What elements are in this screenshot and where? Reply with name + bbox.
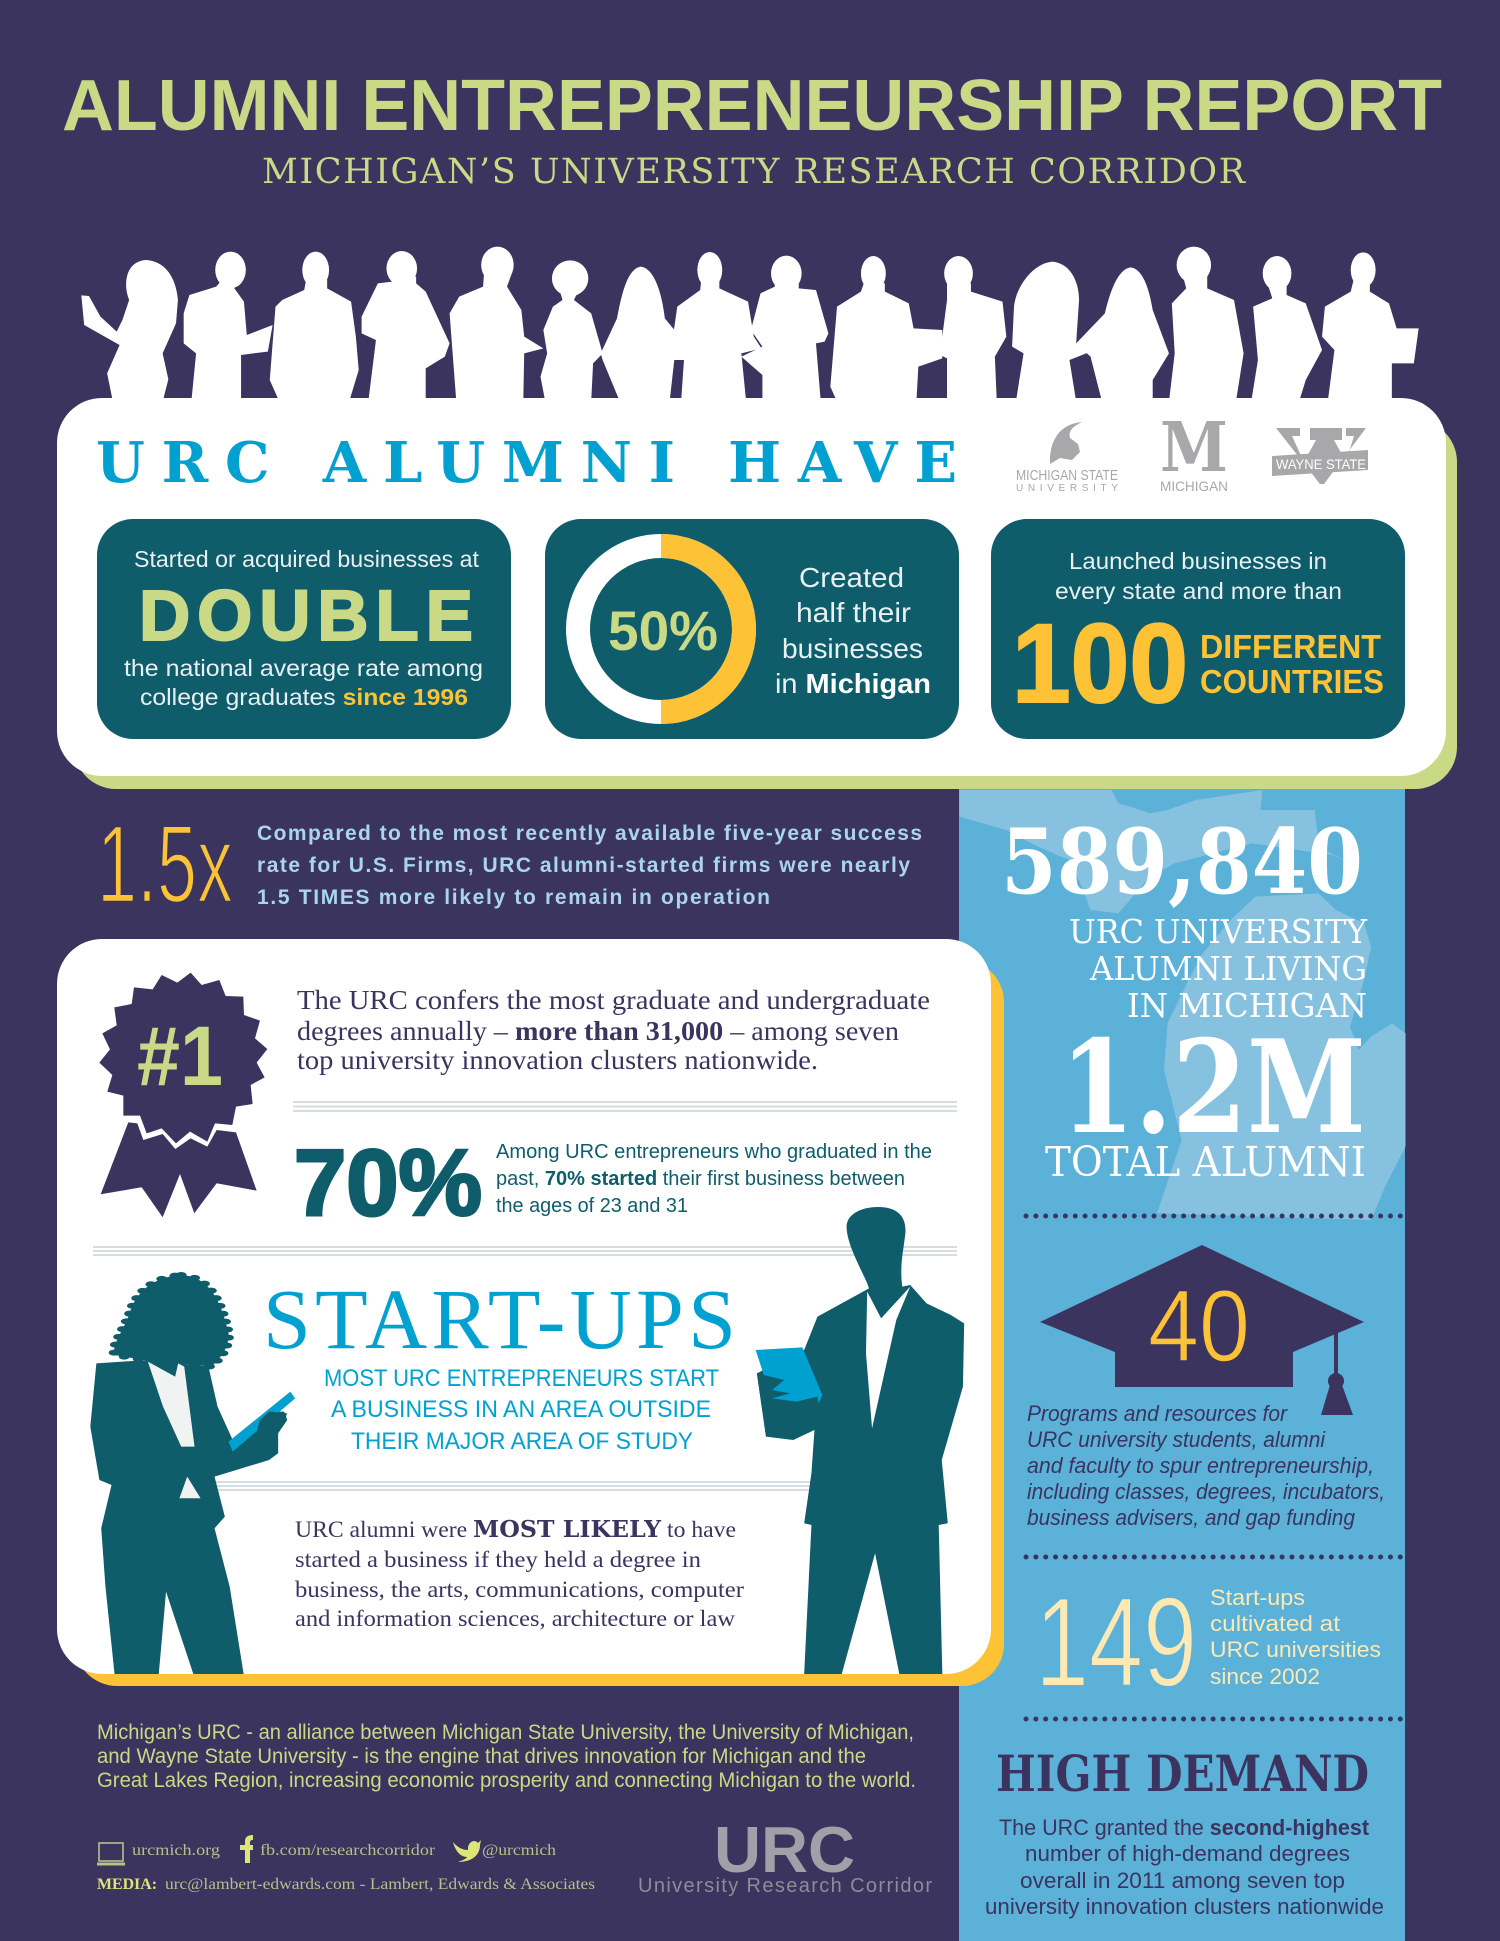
- stat: 589,840 alumni in Michigan: ALUMNI LIVING: [1089, 949, 1367, 988]
- programs text: and faculty to spur entrepreneurship,: [1027, 1453, 1374, 1478]
- text: about the URC: Michigan’s URC - an alliance between Michigan State University, the University of Michigan,: [97, 1721, 914, 1744]
- subheading: MOST URC ENTREPRENEURS START: [324, 1365, 719, 1392]
- text: most likely: started a business if they held a degree in: [295, 1547, 702, 1572]
- text: among URC entrepreneurs: Among URC entrepreneurs who graduated in the: [496, 1141, 932, 1163]
- contact links: MEDIA:: [97, 1876, 157, 1893]
- high demand heading: HIGH DEMAND: [996, 1744, 1369, 1803]
- donut chart: [578, 546, 744, 712]
- text: confers the most degrees: The URC confers the most graduate and undergraduate: [297, 985, 930, 1015]
- logo: URC: University Research Corridor: [638, 1875, 932, 1897]
- card: 50% created in Michigan: half their: [796, 597, 911, 628]
- icon: facebook: [240, 1835, 253, 1863]
- text: confers the most degrees: degrees annually – more than 31,000 – among seven: [297, 1016, 900, 1046]
- stat: 1.2M total alumni: TOTAL ALUMNI: [1045, 1138, 1366, 1186]
- logo: Michigan State: UNIVERSITY: [1016, 483, 1118, 494]
- stat: 589,840 alumni in Michigan: 589,840: [1001, 809, 1363, 915]
- stat: 149 start-ups: cultivated at: [1210, 1611, 1340, 1636]
- text: most likely: URC alumni were MOST LIKELY to have: [295, 1516, 736, 1543]
- icon: graduation cap with 40: 40: [1148, 1269, 1250, 1383]
- card: 100 different countries: [991, 519, 1405, 739]
- card: 100 different countries: 100: [1012, 601, 1188, 726]
- text: five-year success: rate for U.S. Firms, URC alumni-started firms were nearly: [257, 854, 910, 877]
- text: confers the most degrees: top university innovation clusters nationwide.: [297, 1045, 818, 1075]
- donut chart: 50%: [608, 599, 718, 662]
- card: 50% created in Michigan: Created: [799, 562, 904, 593]
- logo: Michigan: M: [1160, 408, 1228, 488]
- logo: Michigan: MICHIGAN: [1160, 478, 1228, 494]
- stat: 589,840 alumni in Michigan: IN MICHIGAN: [1127, 986, 1367, 1025]
- text: among URC entrepreneurs: [496, 1141, 932, 1217]
- card: double the national rate: [97, 519, 511, 739]
- text: five-year success: [257, 822, 922, 909]
- contact links: urc@lambert-edwards.com - Lambert, Edwards & Associates: [165, 1876, 595, 1893]
- stat: 149 start-ups: [1035, 1571, 1381, 1713]
- stat: 589,840 alumni in Michigan: [1001, 809, 1368, 1025]
- subheading: [324, 1365, 719, 1455]
- text: about the URC: [97, 1721, 916, 1792]
- programs text: including classes, degrees, incubators,: [1027, 1479, 1385, 1504]
- stat: 149 start-ups: URC universities: [1210, 1637, 1381, 1662]
- high demand text: university innovation clusters nationwide: [985, 1894, 1384, 1919]
- high demand text: number of high-demand degrees: [1025, 1841, 1350, 1866]
- text: five-year success: 1.5 TIMES more likely to remain in operation: [257, 886, 770, 909]
- programs text: Programs and resources for: [1027, 1401, 1289, 1426]
- text: among URC entrepreneurs: the ages of 23 and 31: [496, 1195, 688, 1217]
- card: 50% created in Michigan: businesses: [782, 633, 923, 664]
- card: double the national rate: the national average rate among: [124, 655, 483, 681]
- text: about the URC: and Wayne State University - is the engine that drives innovation for Michigan and the: [97, 1745, 866, 1768]
- logo: Wayne State: WAYNE STATE: [1276, 456, 1366, 472]
- text: among URC entrepreneurs: past, 70% started their first business between: [496, 1168, 905, 1190]
- silhouettes of alumni: [81, 247, 1419, 402]
- stat: 589,840 alumni in Michigan: URC UNIVERSITY: [1069, 912, 1368, 951]
- card: double the national rate: DOUBLE: [139, 577, 473, 656]
- card: 100 different countries: DIFFERENT: [1200, 628, 1381, 665]
- card: 50% created in Michigan: in Michigan: [775, 668, 931, 699]
- icon: laptop: [97, 1843, 125, 1864]
- contact links: [97, 1835, 595, 1893]
- panel: rankings and start-ups: [57, 939, 1004, 1686]
- card: double the national rate: Started or acquired businesses at: [134, 546, 480, 572]
- high demand text: The URC granted the second-highest: [999, 1815, 1370, 1840]
- stat: 1.2M total alumni: 1.2M: [1060, 1013, 1366, 1163]
- stat: 149 start-ups: Start-ups: [1210, 1585, 1305, 1610]
- silhouette: woman with tablet: [90, 1275, 295, 1674]
- subheading: THEIR MAJOR AREA OF STUDY: [351, 1428, 693, 1455]
- card: 50% created in Michigan: [545, 519, 959, 739]
- heading: URC alumni have: URC ALUMNI HAVE: [96, 430, 957, 496]
- icon: #1 ribbon: [99, 973, 267, 1217]
- text: most likely: and information sciences, architecture or law: [295, 1606, 735, 1631]
- stat: 149 start-ups: 149: [1035, 1571, 1197, 1713]
- contact links: urcmich.org: [132, 1842, 220, 1859]
- logo: URC: URC: [714, 1813, 855, 1886]
- card: 100 different countries: Launched businesses in: [1069, 548, 1327, 574]
- title: ALUMNI ENTREPRENEURSHIP REPORT: [62, 66, 1442, 146]
- logo: Michigan State: [1016, 422, 1118, 494]
- map of Michigan: [959, 790, 1405, 1220]
- icon: graduation cap with 40: [1040, 1245, 1364, 1415]
- icon: twitter: [453, 1840, 481, 1862]
- programs text: [1027, 1401, 1385, 1530]
- high demand text: [985, 1815, 1384, 1919]
- subtitle: MICHIGAN’S UNIVERSITY RESEARCH CORRIDOR: [262, 152, 1247, 192]
- logo: Wayne State: [1272, 428, 1368, 484]
- stat: 1.5x: 1.5x: [97, 803, 233, 926]
- panel: URC alumni have: [57, 247, 1457, 789]
- logo: URC: [638, 1813, 932, 1897]
- programs text: business advisers, and gap funding: [1027, 1505, 1356, 1530]
- stat: 70%: 70%: [294, 1130, 482, 1235]
- contact links: fb.com/researchcorridor: [260, 1842, 436, 1859]
- text: most likely: [295, 1516, 744, 1631]
- logo: Michigan State: MICHIGAN STATE: [1016, 467, 1118, 484]
- subheading: A BUSINESS IN AN AREA OUTSIDE: [331, 1396, 711, 1423]
- programs text: URC university students, alumni: [1027, 1427, 1326, 1452]
- silhouette: man with tablet: [756, 1207, 964, 1674]
- heading: start-ups: START-UPS: [263, 1271, 736, 1367]
- text: confers the most degrees: [297, 985, 930, 1075]
- contact links: @urcmich: [482, 1842, 556, 1859]
- card: 100 different countries: every state and more than: [1055, 578, 1342, 604]
- text: five-year success: Compared to the most recently available five-year success: [257, 822, 922, 845]
- stat: 149 start-ups: since 2002: [1210, 1664, 1320, 1689]
- blue column: alumni statistics: [959, 780, 1405, 1941]
- icon: #1 ribbon: #1: [137, 1009, 223, 1103]
- card: double the national rate: college graduates since 1996: [140, 684, 468, 710]
- high demand text: overall in 2011 among seven top: [1020, 1868, 1345, 1893]
- card: 100 different countries: COUNTRIES: [1200, 663, 1384, 700]
- text: about the URC: Great Lakes Region, increasing economic prosperity and connecting Michigan to the world.: [97, 1769, 916, 1792]
- text: most likely: business, the arts, communications, computer: [295, 1577, 744, 1602]
